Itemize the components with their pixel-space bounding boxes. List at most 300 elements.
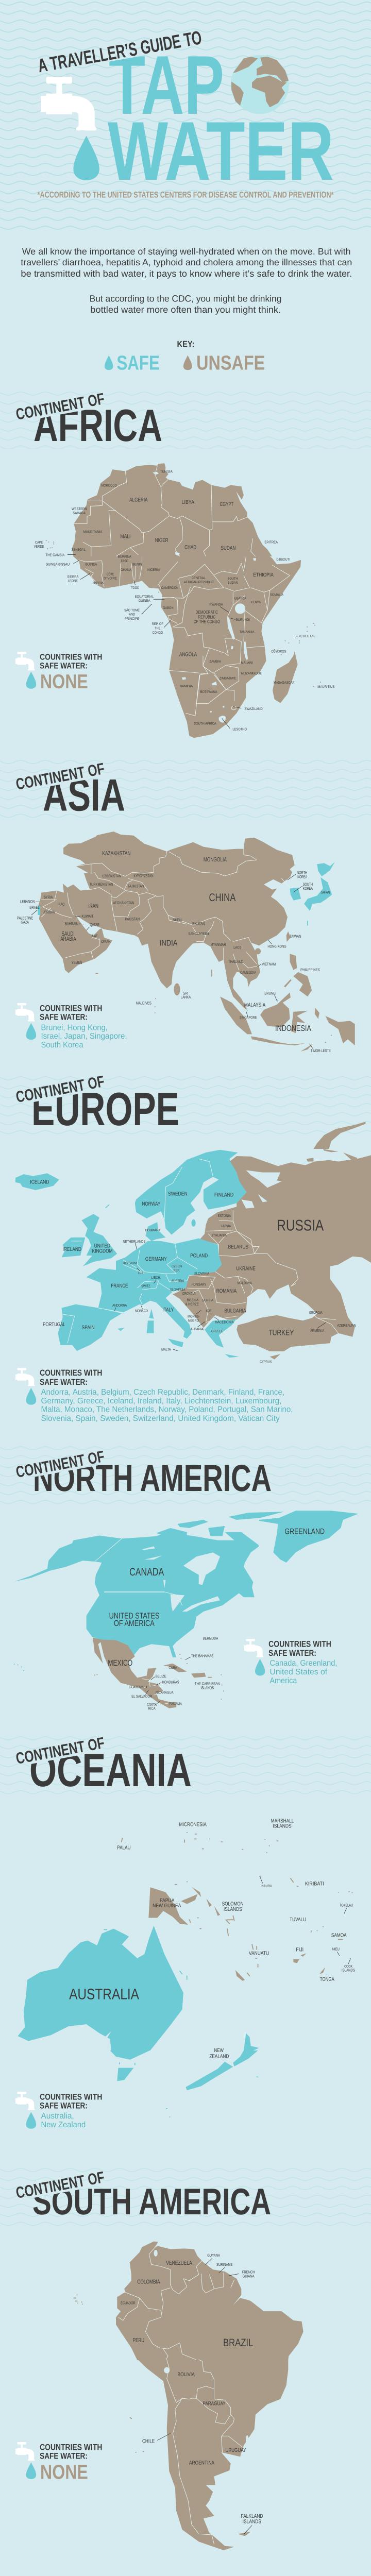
callout: South America safe countries none bbox=[15, 2442, 102, 2483]
map: southern Africa: ETHIOPIA bbox=[253, 571, 274, 578]
map: southern South America: CHILE bbox=[142, 2438, 155, 2444]
map labels: Asia: KOREA bbox=[297, 875, 307, 879]
map: southern Africa: CÔTE bbox=[107, 572, 114, 576]
icon: water drop bbox=[73, 135, 99, 180]
map labels: Asia: SYRIA bbox=[44, 895, 53, 900]
map labels: Europe: NEGRO bbox=[188, 1319, 199, 1323]
map labels: Asia: LEBANON bbox=[20, 900, 35, 904]
callout: Europe safe countries: COUNTRIES WITH bbox=[40, 1368, 102, 1378]
map: southern Africa: SUDAN bbox=[228, 581, 238, 585]
map: southern Africa: MADAGASCAR bbox=[274, 681, 295, 684]
map: southern Africa: SÃO TOMÉ bbox=[124, 608, 140, 612]
map: southern Oceania: ZEALAND bbox=[209, 2053, 229, 2059]
map labels: Europe: ICELAND bbox=[30, 1179, 49, 1185]
map: southern Africa: MOZAMBIQUE bbox=[241, 671, 262, 675]
map labels: North America: GREENLAND bbox=[284, 1527, 325, 1536]
map labels: Asia: THAILAND bbox=[228, 959, 243, 964]
heading: continent of Asia: CONTINENT OF bbox=[14, 759, 106, 793]
callout: Asia safe countries: SAFE WATER: bbox=[40, 1012, 88, 1022]
map labels: Europe: SLOVAKIA bbox=[194, 1272, 209, 1276]
map labels: Asia: TAJIKISTAN bbox=[128, 884, 144, 888]
heading: continent of Africa: CONTINENT OF bbox=[14, 389, 106, 423]
callout: North America safe countries: Canada, Greenland, bbox=[269, 1658, 337, 1668]
map labels: North America: MEXICO bbox=[108, 1658, 132, 1668]
panel: North America map bbox=[14, 1511, 359, 1711]
map: northern Oceania: ISLANDS bbox=[273, 1823, 292, 1829]
map: southern Africa: BURUNDI bbox=[236, 618, 250, 622]
map: southern Africa: NIGERIA bbox=[147, 568, 160, 572]
map labels: Europe: RUSSIA bbox=[277, 1217, 324, 1234]
map labels: Asia: KOREA bbox=[303, 886, 313, 891]
map: southern Africa: RWANDA bbox=[209, 603, 223, 606]
title kicker: A TRAVELLER’S GUIDE TO bbox=[36, 27, 203, 76]
map labels: Asia: MONGOLIA bbox=[204, 856, 227, 863]
map: southern South America: FALKLAND bbox=[241, 2513, 263, 2519]
heading: continent of Asia bbox=[16, 762, 125, 811]
callout: Asia safe countries: Israel, Japan, Singapore, bbox=[41, 1031, 127, 1041]
map labels: Asia: BRUNEI bbox=[264, 991, 276, 995]
map: northern Africa: CHAD bbox=[184, 544, 196, 550]
map labels: North America: COSTA bbox=[147, 1703, 157, 1707]
callout: Europe safe countries: Andorra, Austria, Belgium, Czech Republic, Denmark, Finland, France, bbox=[41, 1387, 284, 1397]
map: safe countries in Asia bbox=[38, 862, 335, 1010]
map labels: Europe: MALTA bbox=[161, 1347, 171, 1351]
map labels: Asia: IRAN bbox=[88, 903, 98, 909]
map labels: Europe: TURKEY bbox=[268, 1328, 294, 1337]
map labels: Asia: TURKMENISTAN bbox=[90, 882, 113, 887]
map: northern Africa bbox=[34, 463, 278, 557]
map labels: Europe: LIECH. bbox=[151, 1276, 161, 1280]
map labels: Europe: FRANCE bbox=[111, 1283, 128, 1289]
map labels: Asia: BANGLADESH bbox=[189, 931, 209, 936]
map labels: Asia: ISRAEL bbox=[29, 905, 40, 910]
map: northern Oceania bbox=[18, 1818, 355, 2050]
map: northern Africa: VERDE bbox=[34, 545, 44, 549]
callout: North America safe countries: America bbox=[269, 1676, 297, 1685]
map: northern South America: PERU bbox=[133, 2337, 144, 2344]
map labels: Asia: KYRGYZSTAN bbox=[133, 874, 154, 878]
map: southern Africa: DEMOCRATIC bbox=[196, 609, 218, 615]
map labels: Asia: INDIA bbox=[160, 939, 177, 947]
map: northern Africa: LIBYA bbox=[182, 499, 194, 505]
map labels: Asia: SRI bbox=[183, 991, 189, 995]
map: northern Oceania: NEW GUINEA bbox=[153, 1903, 181, 1908]
map labels: Europe: SERBIA bbox=[202, 1298, 213, 1302]
map: Novaya Zemlya bbox=[313, 1122, 365, 1149]
map labels: Europe bbox=[30, 1179, 356, 1364]
map: southern Africa: GUINEA bbox=[85, 563, 97, 566]
map labels: Europe: NORWAY bbox=[142, 1201, 160, 1207]
callout: Asia safe countries: Brunei, Hong Kong, bbox=[41, 1023, 108, 1032]
map: unsafe eastern Europe bbox=[173, 1149, 371, 1360]
map labels: Asia: JORDAN bbox=[43, 910, 55, 914]
map: southern Africa: ZAMBIA bbox=[209, 659, 221, 664]
callout: Europe safe countries: Germany, Greece, Iceland, Ireland, Italy, Liechtenstein, Luxembourg, bbox=[41, 1396, 281, 1405]
map: northern Oceania: AUSTRALIA bbox=[69, 1986, 139, 2003]
map: southern Africa: CENTRAL bbox=[192, 576, 206, 580]
map: southern Africa: BURKINA bbox=[118, 555, 131, 558]
map: northern Oceania: ISLANDS bbox=[224, 1906, 242, 1912]
map labels: Europe: BULGARIA bbox=[224, 1308, 246, 1314]
map: northern Oceania: VANUATU bbox=[249, 1950, 269, 1956]
map: northern Africa: CAPE bbox=[35, 540, 43, 545]
map labels: Europe: MOLDOVA bbox=[238, 1281, 252, 1285]
map labels: Asia: MYANMAR bbox=[211, 942, 226, 947]
map labels: Europe: BELGIUM bbox=[123, 1261, 137, 1265]
map: northern South America: COLOMBIA bbox=[137, 2278, 160, 2285]
map: southern Africa: SOUTH AFRICA bbox=[194, 722, 216, 725]
map labels: Europe: ITALY bbox=[162, 1307, 174, 1313]
map: northern Africa: WESTERN bbox=[72, 507, 87, 511]
map labels: Asia: LANKA bbox=[181, 995, 191, 999]
map: southern Africa: MAURITIUS bbox=[317, 685, 334, 689]
map labels: Asia: QATAR bbox=[90, 923, 99, 927]
map labels: Europe: ESTONIA bbox=[217, 1214, 231, 1218]
map: northern Oceania: COOK bbox=[344, 1964, 352, 1969]
callout: North America safe countries: United States of bbox=[269, 1667, 327, 1676]
heading: continent of Europe: EUROPE bbox=[31, 1083, 179, 1136]
heading: continent of Asia: ASIA bbox=[43, 770, 125, 820]
map labels: Asia: INDONESIA bbox=[275, 1024, 311, 1033]
map: northern Oceania: TOKELAU bbox=[340, 1903, 353, 1907]
map labels: Asia: NEPAL bbox=[173, 918, 182, 922]
map labels: Europe: ROMANIA bbox=[216, 1288, 237, 1294]
map labels: Europe: UKRAINE bbox=[236, 1265, 256, 1272]
map labels: Europe: ARMENIA bbox=[310, 1329, 324, 1333]
map: southern Africa: GHANA bbox=[121, 568, 131, 572]
map labels: Europe: MACEDONIA bbox=[215, 1320, 234, 1324]
map: southern Oceania bbox=[15, 2047, 258, 2129]
map labels: Asia: CAMBODIA bbox=[240, 970, 256, 975]
map: northern Africa: MAURITANIA bbox=[83, 530, 103, 534]
map: northern South America: GUIANA bbox=[243, 2274, 255, 2278]
map: northern Oceania: MICRONESIA bbox=[179, 1821, 207, 1827]
map: northern Africa: ERITREA bbox=[264, 540, 278, 544]
map labels: Europe: CROATIA bbox=[182, 1292, 195, 1296]
map labels: Asia: BHUTAN bbox=[192, 922, 205, 926]
heading: continent of Africa bbox=[16, 393, 162, 442]
callout: Africa safe countries none bbox=[15, 652, 102, 693]
map labels: North America: CUBA bbox=[168, 1666, 177, 1670]
legend: unsafe bbox=[183, 351, 265, 374]
CDC note: bottled water more often than you might think. bbox=[90, 304, 281, 315]
map: northern Oceania: ISLANDS bbox=[342, 1968, 355, 1972]
map: southern Africa: SWAZILAND bbox=[244, 707, 263, 711]
map labels: Asia: NORTH bbox=[297, 871, 307, 875]
callout: South America safe countries none: SAFE WATER: bbox=[40, 2451, 88, 2461]
map labels: Europe: & HERZE bbox=[185, 1302, 199, 1306]
map labels: Asia: VIETNAM bbox=[262, 962, 276, 967]
map labels: Asia: LAOS bbox=[233, 945, 241, 950]
key heading: KEY: bbox=[177, 340, 194, 349]
map labels: Asia: TAIWAN bbox=[290, 934, 301, 939]
map: southern South America: ARGENTINA bbox=[189, 2460, 214, 2466]
map labels: Europe: HUNGARY bbox=[191, 1283, 206, 1286]
map: southern Africa: PRÍNCIPE bbox=[125, 617, 139, 621]
map labels: Asia: GAZA bbox=[21, 920, 29, 924]
map labels: Asia: CHINA bbox=[209, 891, 235, 904]
map: northern South America: SURINAME bbox=[216, 2263, 232, 2267]
map labels: North America: PANAMA bbox=[169, 1702, 182, 1706]
callout: Europe safe countries: Slovenia, Spain, Sweden, Switzerland, United Kingdom, Vatican City bbox=[41, 1414, 280, 1422]
map labels: North America: ISLANDS bbox=[200, 1686, 214, 1690]
map: southern Africa: TOGO bbox=[131, 586, 139, 590]
map: northern Africa: SENEGAL bbox=[72, 548, 86, 552]
map labels: Europe: REP. bbox=[174, 1268, 180, 1273]
heading: continent of North America bbox=[16, 1451, 271, 1492]
map labels: North America: CANADA bbox=[129, 1566, 164, 1578]
map: southern South America: ISLANDS bbox=[243, 2518, 261, 2524]
map: northern Africa: NIGER bbox=[155, 537, 168, 543]
map labels: Asia bbox=[17, 850, 331, 1053]
hero illustrations bbox=[21, 55, 352, 267]
callout: Africa safe countries none: SAFE WATER: bbox=[40, 662, 88, 670]
map labels: Europe: GEORGIA bbox=[309, 1311, 323, 1315]
map: northern Africa: SAHARA bbox=[73, 511, 86, 515]
heading: continent of Oceania: CONTINENT OF bbox=[14, 1734, 106, 1768]
map: southern Africa: TANZANIA bbox=[240, 630, 255, 634]
CDC note: But according to the CDC, you might be drinking bbox=[90, 293, 281, 303]
map: southern Africa: GABON bbox=[163, 606, 174, 609]
map labels: Asia: JAPAN bbox=[321, 890, 330, 895]
panel: Europe map bbox=[15, 1149, 371, 1422]
map labels: Asia: MALAYSIA bbox=[244, 1002, 265, 1008]
map: southern Africa: GUINEA bbox=[139, 599, 150, 603]
map: southern South America: URUGUAY bbox=[226, 2447, 246, 2453]
map labels: Europe: KINGDOM bbox=[92, 1248, 113, 1254]
callout: Oceania safe countries: New Zealand bbox=[41, 2120, 86, 2129]
map: southern Africa: KENYA bbox=[251, 600, 261, 604]
callout: Asia safe countries: South Korea bbox=[41, 1040, 83, 1049]
map: northern Africa: EGYPT bbox=[220, 501, 233, 507]
map: northern Africa: MALI bbox=[120, 533, 130, 539]
intro and key bbox=[21, 268, 352, 374]
map labels: North America: THE CARRIBEAN bbox=[195, 1682, 220, 1686]
CDC note bbox=[90, 293, 281, 315]
map labels: Europe: ALBANIA bbox=[191, 1327, 204, 1331]
map: southern Africa: CONGO bbox=[153, 631, 163, 635]
map labels: Europe: SPAIN bbox=[81, 1325, 95, 1331]
map: southern Africa: BOTSWANA bbox=[200, 690, 217, 694]
map labels: Asia: KUWAIT bbox=[81, 914, 93, 919]
map labels: Europe: CZECH bbox=[172, 1264, 182, 1268]
map: southern Africa: SOUTH bbox=[228, 577, 238, 581]
map: northern Oceania: PAPUA bbox=[160, 1897, 174, 1904]
map labels: Asia: IRAQ bbox=[58, 902, 64, 906]
map: seas and lakes bbox=[241, 1170, 281, 1209]
callout: Asia safe countries: COUNTRIES WITH bbox=[40, 1004, 102, 1013]
map labels: Europe: LUX. bbox=[138, 1271, 144, 1275]
map labels: Europe: BELARUS bbox=[228, 1244, 248, 1250]
map: northern Africa: THE GAMBIA bbox=[46, 553, 65, 557]
map labels: Asia: ARABIA bbox=[60, 936, 76, 942]
map labels: North America: BERMUDA bbox=[203, 1636, 218, 1641]
map labels: North America: RICA bbox=[148, 1706, 156, 1711]
callout: Asia safe countries bbox=[15, 1003, 127, 1049]
callout: Africa safe countries none: NONE bbox=[40, 670, 88, 693]
map: southern Africa: MALAWI bbox=[241, 661, 253, 665]
map: southern Africa: REP. OF bbox=[152, 622, 163, 626]
map: northern Africa: MOROCCO bbox=[102, 483, 117, 487]
map: southern Africa: REPUBLIC bbox=[198, 614, 215, 619]
legend: safe bbox=[105, 351, 160, 374]
map labels: North America: BELIZE bbox=[156, 1674, 166, 1679]
map labels: Asia: PALESTINE bbox=[17, 916, 33, 920]
map labels: Europe: BOSNIA bbox=[187, 1298, 198, 1302]
map labels: Asia: SAUDI bbox=[61, 930, 75, 937]
heading: continent of North America: NORTH AMERICA bbox=[33, 1458, 272, 1499]
map: southern Africa: THE bbox=[155, 626, 160, 630]
map: Mexico, Central America and Caribbean bbox=[93, 1638, 224, 1708]
icon: globe bbox=[231, 55, 289, 114]
map: southern Africa: SEYCHELLES bbox=[295, 634, 314, 638]
map: southern Africa: EQUATORIAL bbox=[135, 595, 154, 598]
map labels: Europe: NETHERLANDS bbox=[123, 1240, 145, 1244]
icon: white tap bbox=[41, 77, 96, 130]
map: southern Africa: OF THE CONGO bbox=[194, 619, 220, 624]
map labels: Europe: ANDORRA bbox=[112, 1303, 127, 1308]
map labels: Asia: KAZAKHSTAN bbox=[102, 850, 130, 857]
map labels: North America bbox=[108, 1527, 325, 1711]
callout: Oceania safe countries: COUNTRIES WITH bbox=[40, 2092, 102, 2102]
map: northern South America: VENEZUELA bbox=[166, 2260, 192, 2266]
map: northern Oceania: KIRIBATI bbox=[305, 1881, 324, 1887]
map labels: Europe: MONACO bbox=[135, 1309, 148, 1313]
map labels: Asia: UZBEKISTAN bbox=[102, 874, 121, 878]
map: northern Oceania: SOLOMON bbox=[222, 1901, 243, 1907]
map: southern Africa: CAMEROON bbox=[161, 586, 178, 590]
map labels: Europe: GERMANY bbox=[145, 1256, 167, 1262]
map labels: North America: HONDURAS bbox=[162, 1680, 179, 1685]
panel: South America map bbox=[15, 2241, 303, 2550]
map: southern Africa: UGANDA bbox=[234, 597, 246, 600]
map labels: Europe: MONTE- bbox=[188, 1315, 199, 1318]
map: northern Oceania: SAMOA bbox=[331, 1932, 347, 1938]
map labels: Europe: PORTUGAL bbox=[43, 1321, 65, 1327]
callout: South America safe countries none: NONE bbox=[40, 2461, 88, 2483]
heading: continent of Africa: AFRICA bbox=[33, 400, 162, 451]
callout: Europe safe countries: SAFE WATER: bbox=[40, 1377, 88, 1386]
heading: continent of South America: SOUTH AMERICA bbox=[32, 2181, 271, 2223]
map labels: Europe: FINLAND bbox=[214, 1192, 233, 1198]
map labels: North America: NICARAGUA bbox=[156, 1690, 174, 1694]
map labels: Asia: BAHRAIN bbox=[65, 922, 78, 926]
map: southern Africa: NAMIBIA bbox=[180, 684, 193, 688]
map labels: Asia: SOUTH bbox=[303, 882, 313, 887]
map: northern Africa: ALGERIA bbox=[129, 497, 148, 503]
callout: Europe safe countries bbox=[15, 1368, 293, 1422]
map: southern Africa: DJIBOUTI bbox=[276, 557, 290, 561]
panel: Oceania map bbox=[15, 1818, 355, 2129]
callout: North America safe countries: SAFE WATER: bbox=[268, 1648, 316, 1657]
map: southern Africa: AFRICAN REPUBLIC bbox=[184, 580, 214, 584]
map labels: Asia: MALDIVES bbox=[136, 1001, 151, 1006]
map labels: Asia: HONG KONG bbox=[267, 944, 286, 948]
map: southern Africa: SIERRA bbox=[67, 575, 79, 579]
map: southern Africa: LESOTHO bbox=[232, 727, 247, 731]
map labels: Europe: DENMARK bbox=[145, 1228, 161, 1232]
heading: continent of South America bbox=[16, 2171, 270, 2215]
map: northern Oceania: MARSHALL bbox=[271, 1818, 294, 1824]
map: northern South America: ECUADOR bbox=[121, 2301, 136, 2306]
panel: Africa map bbox=[15, 463, 334, 738]
map: Hudson Bay and lakes bbox=[142, 1546, 220, 1612]
panel: Asia map bbox=[15, 832, 365, 1149]
map: northern Oceania: TONGA bbox=[320, 1976, 334, 1982]
map: southern Africa: AND bbox=[129, 613, 135, 616]
map: northern South America bbox=[74, 2241, 303, 2362]
map: northern Oceania: FIJI bbox=[296, 1946, 303, 1953]
map labels: Europe: SLOVENIA bbox=[170, 1287, 185, 1292]
map labels: Europe: CYPRUS bbox=[260, 1360, 272, 1364]
map: southern South America: PARAGUAY bbox=[203, 2400, 226, 2406]
map labels: Asia: PAKISTAN bbox=[125, 917, 140, 922]
callout: Oceania safe countries: Australia, bbox=[41, 2111, 74, 2121]
map: southern Africa: GUINEA-BISSAU bbox=[46, 563, 70, 566]
map: northern South America: FRENCH bbox=[242, 2270, 255, 2275]
map: southern Africa: SOMALIA bbox=[270, 593, 283, 597]
map: southern Oceania: NEW bbox=[214, 2047, 224, 2054]
title word: TAP: TAP bbox=[109, 39, 224, 132]
map labels: Asia: YEMEN bbox=[72, 960, 82, 965]
map labels: Europe: LITHUANIA bbox=[211, 1233, 227, 1238]
map: southern Africa: D’IVOIRE bbox=[104, 577, 117, 580]
map: southern Africa: ZIMBABWE bbox=[220, 676, 236, 680]
map: northern South America: GUYANA bbox=[207, 2253, 220, 2258]
map: northern Oceania: NAURU bbox=[261, 1884, 272, 1888]
map labels: Asia: UAE bbox=[92, 934, 98, 938]
heading: continent of South America: CONTINENT OF bbox=[14, 2168, 106, 2202]
callout: Africa safe countries none: COUNTRIES WITH bbox=[40, 652, 102, 662]
heading: continent of Oceania: OCEANIA bbox=[29, 1744, 192, 1797]
map labels: Europe: GREECE bbox=[211, 1329, 223, 1333]
map labels: Europe: SWEDEN bbox=[168, 1191, 188, 1197]
intro paragraph lines 1-2 bbox=[21, 246, 352, 267]
legend: safe: SAFE bbox=[116, 351, 160, 374]
map labels: Asia: AFGHANISTAN bbox=[113, 901, 134, 905]
map: islands of Asia bbox=[96, 931, 355, 1052]
callout: North America safe countries bbox=[244, 1639, 337, 1685]
map labels: North America: UNITED STATES bbox=[109, 1611, 159, 1620]
map labels: North America: THE BAHAMAS bbox=[191, 1654, 213, 1658]
map: southern Africa: CÔMOROS bbox=[271, 649, 286, 653]
map: northern South America: BRAZIL bbox=[223, 2337, 253, 2349]
map labels: Europe: UNITED bbox=[94, 1243, 110, 1249]
callout: Oceania safe countries bbox=[15, 2092, 102, 2129]
map: northern Africa: TUNISIA bbox=[160, 469, 173, 473]
map labels: Europe: SWITZ. bbox=[141, 1284, 151, 1288]
map labels: North America: GUATEMALA bbox=[129, 1685, 147, 1689]
map: southern Africa: ANGOLA bbox=[179, 651, 197, 657]
heading: continent of Europe bbox=[16, 1076, 178, 1126]
map: northern Oceania: NIEU bbox=[332, 1947, 340, 1952]
map: mainland Asia bbox=[38, 832, 295, 1010]
map labels: Asia: TIMOR-LESTE bbox=[311, 1048, 331, 1053]
map labels: Europe: IRELAND bbox=[63, 1246, 81, 1252]
map labels: Europe: KOS. bbox=[206, 1309, 212, 1313]
map: southern South America bbox=[15, 2360, 288, 2550]
map labels: North America: EL SALVADOR bbox=[131, 1694, 152, 1699]
map labels: Asia: OMAN bbox=[102, 939, 110, 944]
title: A Traveller's Guide to Tap Water bbox=[39, 31, 333, 180]
map labels: Europe: AZERBAIJAN bbox=[337, 1324, 356, 1328]
map labels: North America: OF AMERICA bbox=[114, 1618, 155, 1628]
map: northern Oceania: PALAU bbox=[117, 1845, 130, 1851]
map labels: Asia: PHILIPPINES bbox=[300, 968, 320, 972]
heading: continent of North America: CONTINENT OF bbox=[14, 1447, 106, 1481]
map: Europe borders bbox=[63, 1159, 339, 1343]
map: northern Oceania: TUVALU bbox=[290, 1917, 306, 1922]
